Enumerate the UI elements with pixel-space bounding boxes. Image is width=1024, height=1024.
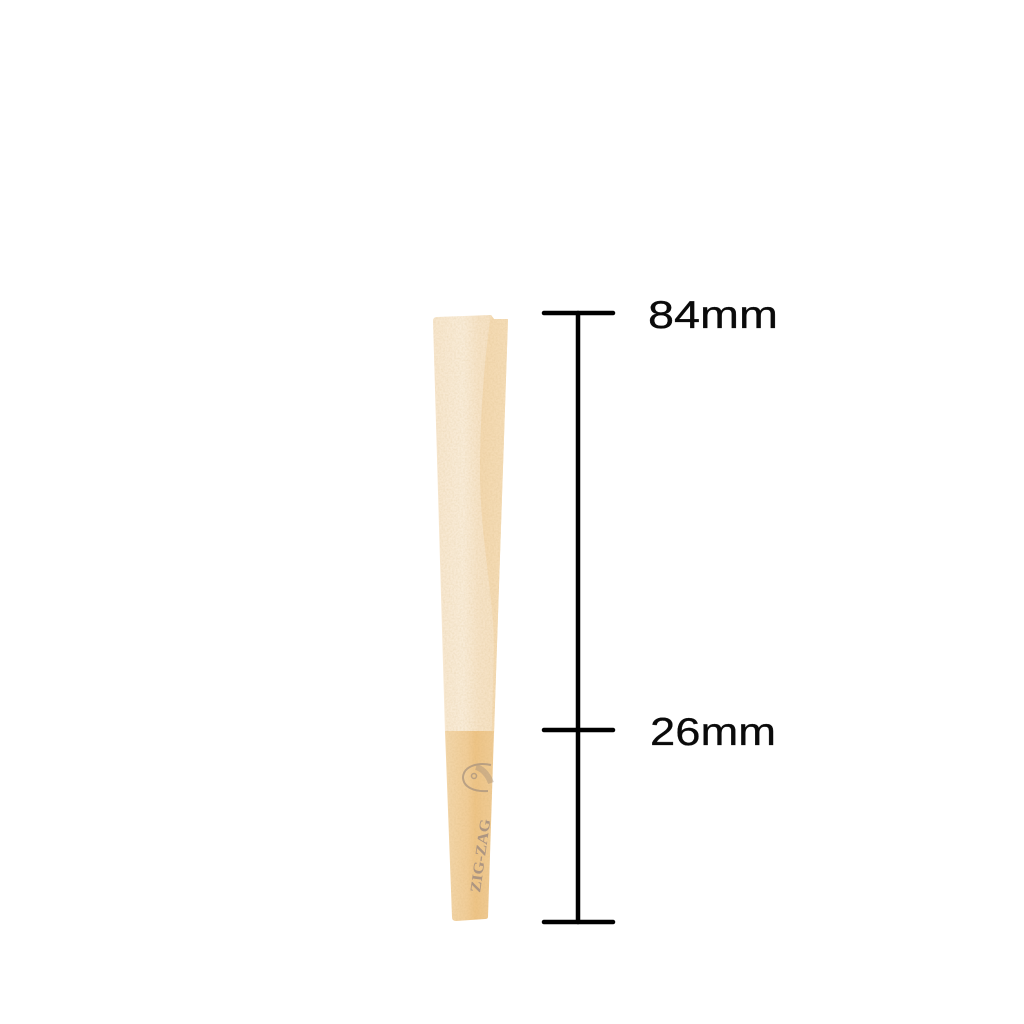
label: 84mm: 84mm [648, 294, 778, 337]
bottom tick [544, 920, 613, 924]
paper grain [433, 315, 508, 921]
brand text on filter: ZIG-ZAG [468, 818, 494, 894]
cone body [433, 315, 508, 733]
measurement scale [544, 313, 613, 922]
middle tick [544, 728, 613, 732]
brand logo stamp [463, 764, 491, 791]
vertical line [576, 313, 580, 922]
filter tip [445, 731, 494, 921]
label: 26mm: 26mm [650, 711, 776, 754]
overlapping paper fold [480, 315, 508, 733]
paper cone [433, 315, 508, 921]
top tick [544, 311, 613, 315]
